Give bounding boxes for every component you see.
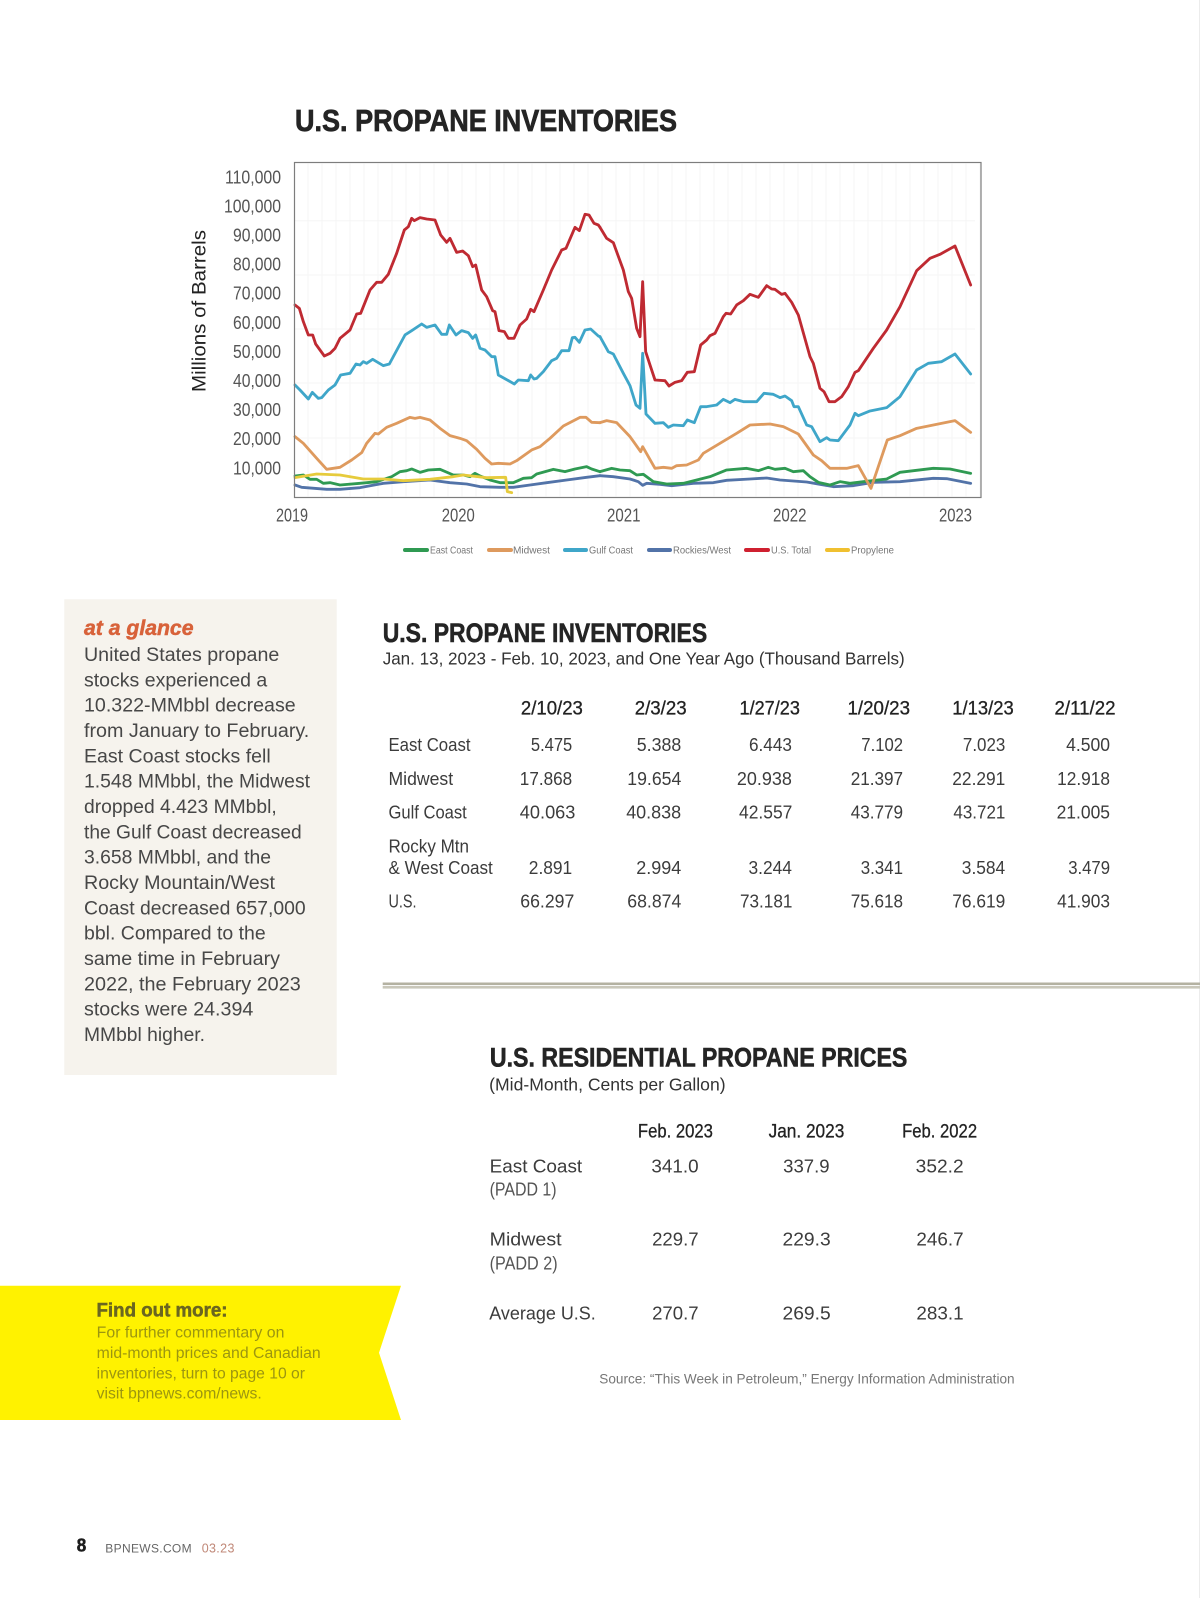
- table column headers: 2/11/22: [1054, 698, 1116, 719]
- row: U.S.: 73.181: [740, 891, 792, 912]
- row: Midwest: 19.654: [627, 768, 681, 789]
- table column headers: 2/10/23: [521, 698, 583, 719]
- x-axis labels: 2020: [442, 505, 475, 526]
- row: Midwest PADD 2: 246.7: [916, 1229, 964, 1250]
- at a glance heading: at a glance: [84, 617, 194, 640]
- row: U.S.: [388, 891, 1110, 912]
- row: East Coast PADD 1: 337.9: [783, 1156, 830, 1177]
- row: Gulf Coast: 43.721: [953, 802, 1005, 823]
- row: East Coast: 7.102: [861, 734, 903, 755]
- prices column headers: Jan. 2023: [769, 1121, 844, 1142]
- row: Midwest: 12.918: [1057, 768, 1110, 789]
- series: East Coast: [295, 467, 971, 485]
- row: U.S.: 75.618: [851, 891, 903, 912]
- row: East Coast PADD 1: East Coast: [490, 1156, 582, 1177]
- source note: Source: “This Week in Petroleum,” Energy Information Administration: [599, 1370, 1015, 1386]
- callout heading: Find out more:: [96, 1300, 228, 1322]
- row: East Coast: East Coast: [388, 734, 470, 755]
- callout body: [97, 1325, 321, 1403]
- at a glance body text: United States propane: [84, 645, 279, 666]
- prices heading: U.S. RESIDENTIAL PROPANE PRICES: [490, 1043, 907, 1073]
- table column headers: 1/27/23: [740, 698, 800, 719]
- chart legend: Propylene: [851, 545, 894, 556]
- chart legend: East Coast: [430, 545, 473, 556]
- row: Gulf Coast: 42.557: [739, 802, 792, 823]
- y-axis labels: 80,000: [233, 254, 281, 275]
- line chart: propane inventories 2019-2023: [188, 162, 981, 556]
- series: Midwest: [295, 417, 971, 488]
- row: Average U.S.: [489, 1302, 964, 1323]
- series: Propylene: [295, 474, 512, 493]
- at a glance body text: East Coast stocks fell: [84, 746, 271, 767]
- series: Gulf Coast: [295, 324, 971, 442]
- y-axis title: Millions of Barrels: [188, 230, 210, 392]
- row: Gulf Coast: [388, 802, 1110, 823]
- at a glance body text: bbl. Compared to the: [84, 924, 266, 945]
- y-axis labels: 60,000: [233, 312, 281, 333]
- row: East Coast: 4.500: [1066, 734, 1110, 755]
- row: Rocky Mtn and West Coast: Rocky Mtn: [388, 835, 469, 856]
- footer: folio: BPNEWS.COM: [105, 1541, 192, 1555]
- at a glance body text: stocks experienced a: [84, 670, 268, 691]
- heading: chart title: U.S. PROPANE INVENTORIES: [295, 103, 677, 138]
- row: Average U.S.: Average U.S.: [489, 1302, 596, 1323]
- table subheading: Jan. 13, 2023 - Feb. 10, 2023, and One Year Ago (Thousand Barrels): [383, 648, 905, 668]
- row: Average U.S.: 270.7: [652, 1302, 699, 1323]
- row: Midwest PADD 2: 229.3: [782, 1229, 831, 1250]
- callout body: mid-month prices and Canadian: [97, 1345, 321, 1362]
- y-axis labels: 30,000: [233, 399, 281, 420]
- footer: folio: [77, 1535, 234, 1556]
- row: Midwest: 21.397: [851, 768, 903, 789]
- row: East Coast PADD 1: (PADD 1): [490, 1179, 557, 1200]
- at a glance body text: [84, 645, 311, 1046]
- at a glance body text: MMbbl higher.: [84, 1025, 205, 1046]
- chart legend: Gulf Coast: [589, 545, 633, 556]
- table column headers: 2/3/23: [635, 698, 687, 719]
- row: East Coast PADD 1: [490, 1156, 964, 1200]
- table column headers: 1/13/23: [952, 698, 1014, 719]
- footer: folio: 03.23: [202, 1541, 234, 1555]
- table: U.S. residential propane prices: [489, 1043, 1015, 1386]
- row: U.S.: 76.619: [952, 891, 1005, 912]
- x-axis labels: [276, 505, 972, 526]
- at a glance body text: the Gulf Coast decreased: [84, 822, 302, 843]
- row: East Coast: 5.475: [531, 734, 572, 755]
- x-axis labels: 2022: [773, 505, 806, 526]
- row: Midwest: 17.868: [520, 768, 572, 789]
- row: Midwest: [388, 768, 1110, 789]
- at a glance body text: 3.658 MMbbl, and the: [84, 848, 271, 869]
- series: U.S. Total: [295, 214, 971, 402]
- chart legend: U.S. Total: [771, 545, 811, 556]
- row: Rocky Mtn and West Coast: 3.341: [861, 857, 903, 878]
- row: Rocky Mtn and West Coast: & West Coast: [388, 857, 493, 878]
- row: Midwest: 20.938: [737, 768, 792, 789]
- x-axis labels: 2019: [276, 505, 308, 526]
- y-axis labels: 110,000: [225, 166, 281, 187]
- row: Average U.S.: 269.5: [782, 1302, 831, 1323]
- callout body: For further commentary on: [97, 1325, 284, 1342]
- row: Rocky Mtn and West Coast: 3.244: [748, 857, 792, 878]
- row: Midwest PADD 2: Midwest: [490, 1229, 562, 1250]
- row: Midwest PADD 2: (PADD 2): [490, 1252, 558, 1273]
- row: Gulf Coast: 40.838: [626, 802, 681, 823]
- row: Midwest: 22.291: [952, 768, 1005, 789]
- row: Rocky Mtn and West Coast: 3.584: [962, 857, 1005, 878]
- row: Midwest PADD 2: [490, 1229, 964, 1273]
- at a glance body text: 1.548 MMbbl, the Midwest: [84, 772, 311, 793]
- at a glance body text: 2022, the February 2023: [84, 974, 301, 995]
- row: East Coast: [388, 734, 1110, 755]
- row: Gulf Coast: 21.005: [1057, 802, 1110, 823]
- x-axis labels: 2021: [607, 505, 640, 526]
- callout: find out more banner: [0, 1286, 401, 1420]
- callout body: inventories, turn to page 10 or: [97, 1365, 305, 1382]
- table column headers: [521, 698, 1116, 719]
- at a glance body text: Coast decreased 657,000: [84, 898, 306, 919]
- y-axis labels: 70,000: [233, 283, 281, 304]
- row: Rocky Mtn and West Coast: 2.891: [529, 857, 572, 878]
- at a glance body text: same time in February: [84, 949, 281, 970]
- row: Midwest PADD 2: 229.7: [652, 1229, 699, 1250]
- prices column headers: Feb. 2023: [638, 1121, 713, 1142]
- chart legend: [403, 545, 894, 556]
- prices column headers: Feb. 2022: [902, 1121, 977, 1142]
- at a glance body text: Rocky Mountain/West: [84, 873, 276, 894]
- y-axis labels: 40,000: [233, 370, 281, 391]
- row: East Coast: 7.023: [963, 734, 1005, 755]
- prices subheading: (Mid-Month, Cents per Gallon): [489, 1075, 726, 1095]
- chart legend: Midwest: [513, 545, 550, 556]
- at a glance body text: stocks were 24.394: [84, 1000, 254, 1021]
- row: East Coast: 5.388: [637, 734, 681, 755]
- prices column headers: [638, 1121, 977, 1142]
- row: Gulf Coast: 40.063: [520, 802, 575, 823]
- row: Rocky Mtn and West Coast: 2.994: [636, 857, 681, 878]
- row: Rocky Mtn and West Coast: 3.479: [1068, 857, 1110, 878]
- row: Rocky Mtn and West Coast: [388, 835, 1110, 878]
- at a glance body text: 10.322-MMbbl decrease: [84, 696, 296, 717]
- row: Midwest: Midwest: [388, 768, 453, 789]
- row: U.S.: 66.297: [520, 891, 574, 912]
- callout body: visit bpnews.com/news.: [97, 1386, 262, 1403]
- row: East Coast: 6.443: [749, 734, 792, 755]
- row: U.S.: 41.903: [1057, 891, 1110, 912]
- chart legend: Rockies/West: [673, 545, 731, 556]
- table: U.S. propane inventories: [383, 618, 1116, 912]
- series: Rockies/West: [295, 476, 971, 489]
- panel: at a glance: [64, 599, 337, 1075]
- row: Gulf Coast: 43.779: [851, 802, 903, 823]
- at a glance body text: from January to February.: [84, 721, 309, 742]
- row: U.S.: U.S.: [388, 891, 416, 912]
- y-axis labels: 100,000: [224, 195, 281, 216]
- footer: folio: 8: [77, 1535, 86, 1556]
- y-axis labels: 10,000: [233, 457, 281, 478]
- row: Average U.S.: 283.1: [916, 1302, 964, 1323]
- y-axis labels: [224, 166, 281, 478]
- row: U.S.: 68.874: [627, 891, 681, 912]
- x-axis labels: 2023: [939, 505, 972, 526]
- series lines: [295, 214, 971, 493]
- row: East Coast PADD 1: 352.2: [916, 1156, 964, 1177]
- table heading: U.S. PROPANE INVENTORIES: [383, 618, 707, 648]
- y-axis labels: 90,000: [233, 224, 281, 246]
- y-axis labels: 20,000: [233, 428, 281, 449]
- table column headers: 1/20/23: [848, 698, 910, 719]
- y-axis labels: 50,000: [233, 341, 281, 362]
- at a glance body text: dropped 4.423 MMbbl,: [84, 797, 277, 818]
- row: East Coast PADD 1: 341.0: [651, 1156, 699, 1177]
- row: Gulf Coast: Gulf Coast: [388, 802, 467, 823]
